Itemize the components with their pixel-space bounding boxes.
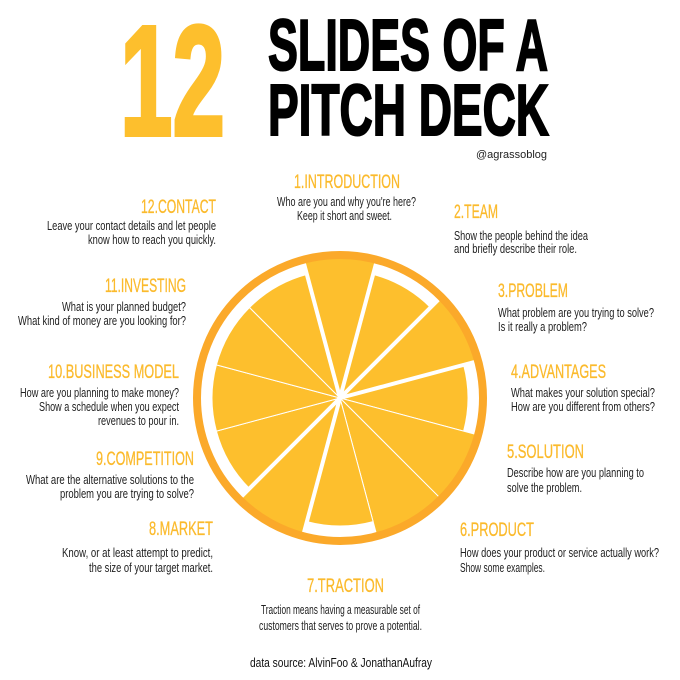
3 problem: Is it really a problem? — [498, 320, 587, 334]
10 business model — [20, 362, 179, 428]
9 competition: 9.COMPETITION — [96, 449, 194, 470]
10 business model: Show a schedule when you expect — [39, 400, 179, 414]
7 traction: Traction means having a measurable set of — [261, 603, 420, 617]
2 team: 2.TEAM — [454, 202, 498, 223]
6 product: 6.PRODUCT — [460, 520, 534, 541]
title — [268, 6, 549, 151]
7 traction: 7.TRACTION — [307, 576, 384, 597]
6 product: Show some examples. — [460, 561, 545, 575]
8 market: 8.MARKET — [149, 519, 213, 540]
2 team: and briefly describe their role. — [454, 242, 577, 256]
9 competition: problem you are trying to solve? — [60, 487, 194, 501]
8 market: the size of your target market. — [89, 561, 213, 575]
5 solution: 5.SOLUTION — [507, 442, 584, 463]
1 introduction: Who are you and why you're here? — [277, 195, 416, 209]
2 team — [454, 202, 588, 256]
8 market — [62, 519, 213, 575]
3 problem: 3.PROBLEM — [498, 281, 568, 302]
10 business model: revenues to pour in. — [98, 414, 179, 428]
9 competition — [26, 449, 194, 501]
5 solution — [507, 442, 644, 495]
6 product — [460, 520, 659, 575]
1 introduction: Keep it short and sweet. — [297, 209, 392, 223]
3 problem — [498, 281, 654, 334]
4 advantages — [511, 362, 655, 414]
7 traction — [259, 576, 422, 633]
10 business model: How are you planning to make money? — [20, 386, 179, 400]
4 advantages: 4.ADVANTAGES — [511, 362, 606, 383]
11 investing — [18, 276, 186, 328]
10 business model: 10.BUSINESS MODEL — [48, 362, 179, 383]
12 contact: know how to reach you quickly. — [88, 233, 216, 247]
5 solution: solve the problem. — [507, 481, 582, 495]
12 contact — [47, 197, 216, 247]
pie chart — [197, 255, 483, 541]
2 team: Show the people behind the idea — [454, 229, 588, 243]
handle: @agrassoblog — [476, 149, 547, 161]
7 traction: customers that serves to prove a potential. — [259, 619, 422, 633]
data source: data source: AlvinFoo & JonathanAufray — [250, 656, 433, 670]
11 investing: What is your planned budget? — [62, 300, 186, 314]
8 market: Know, or at least attempt to predict, — [62, 546, 213, 560]
9 competition: What are the alternative solutions to the — [26, 473, 194, 487]
12 contact: Leave your contact details and let people — [47, 219, 216, 233]
1 introduction: 1.INTRODUCTION — [294, 172, 400, 193]
11 investing: 11.INVESTING — [105, 276, 186, 297]
11 investing: What kind of money are you looking for? — [18, 314, 186, 328]
12 contact: 12.CONTACT — [141, 197, 216, 218]
1 introduction — [277, 172, 416, 223]
